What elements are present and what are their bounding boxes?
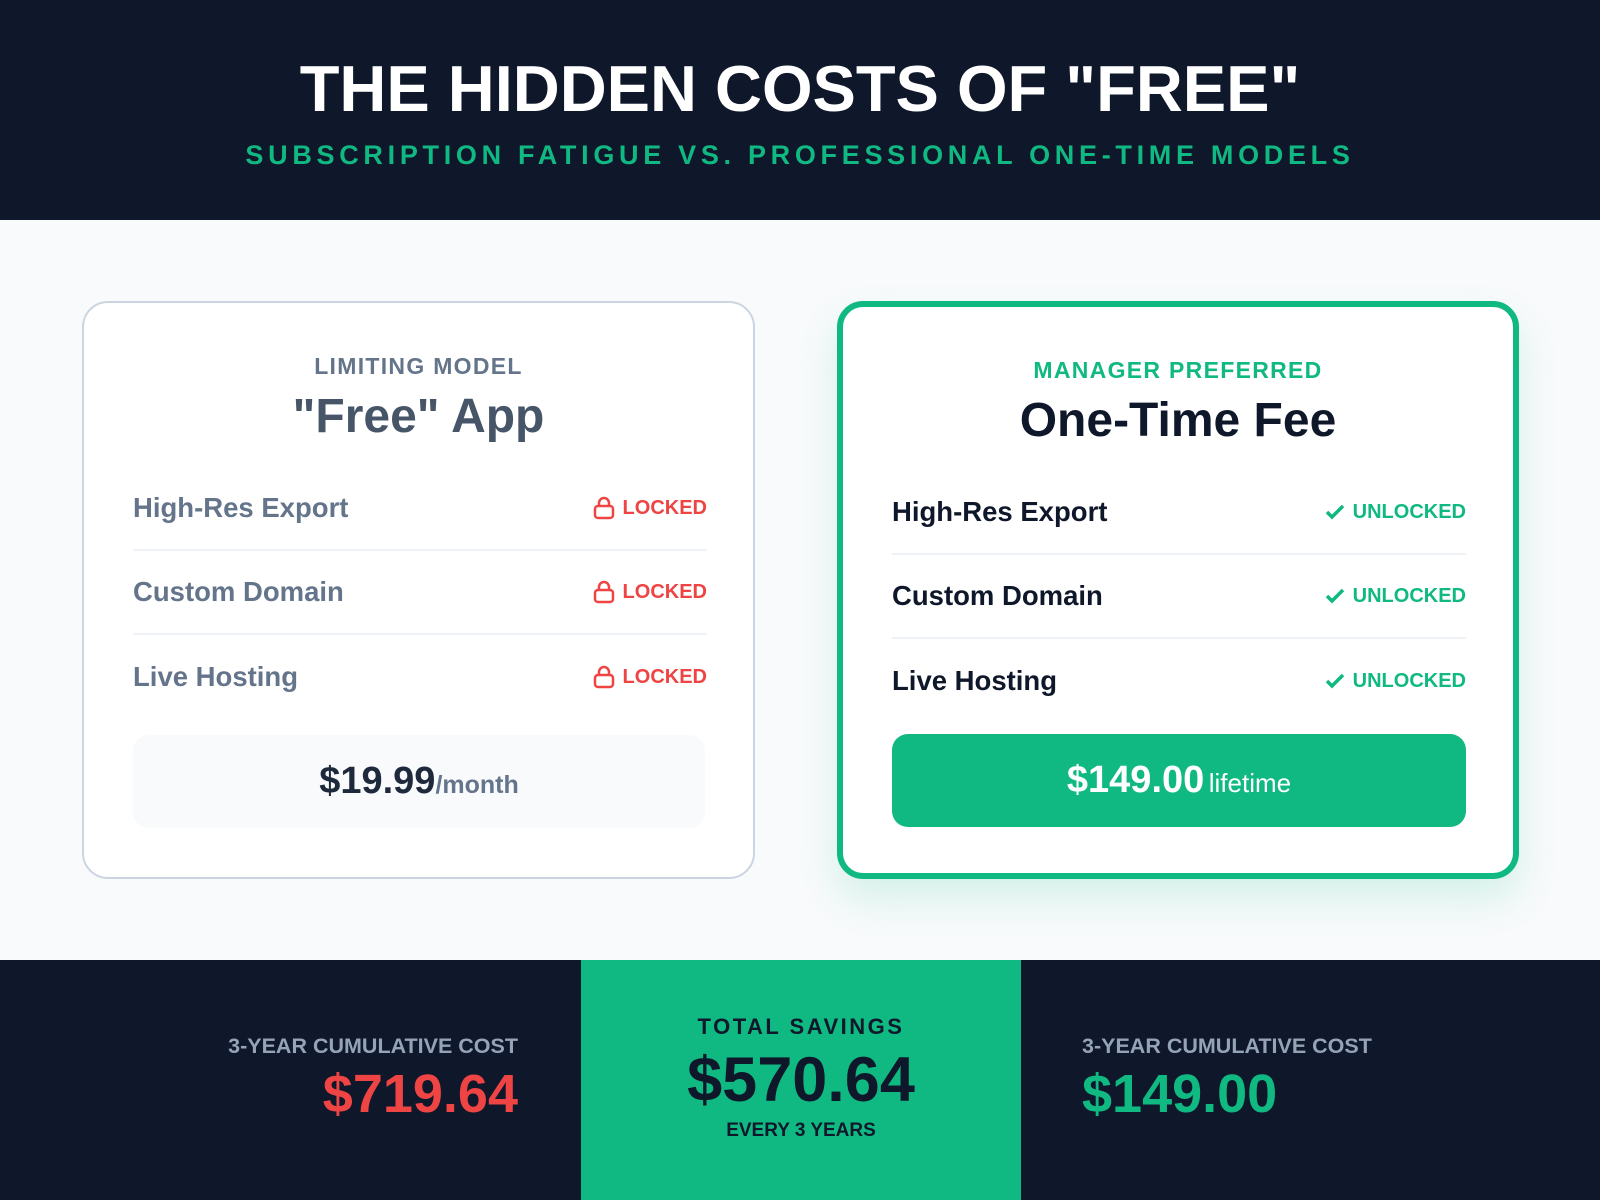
footer xyxy=(0,960,1600,1200)
feature rows: UNLOCKED xyxy=(1353,670,1466,692)
price box: $19.99/month xyxy=(319,760,519,802)
left stat: 3-YEAR CUMULATIVE COST xyxy=(228,1034,518,1058)
left stat: $719.64 xyxy=(323,1064,518,1124)
right stat: 3-YEAR CUMULATIVE COST xyxy=(1082,1034,1372,1058)
right stat xyxy=(1082,1034,1372,1124)
center savings: EVERY 3 YEARS xyxy=(726,1120,876,1141)
feature rows: High-Res Export xyxy=(892,496,1107,527)
center savings xyxy=(581,960,1021,1200)
feature rows: Live Hosting xyxy=(133,661,298,692)
feature rows xyxy=(892,496,1466,696)
price box xyxy=(133,735,705,828)
label: LIMITING MODEL xyxy=(314,353,523,379)
center savings: TOTAL SAVINGS xyxy=(698,1014,904,1039)
feature rows: UNLOCKED xyxy=(1353,584,1466,606)
label: MANAGER PREFERRED xyxy=(1033,357,1323,383)
right stat: $149.00 xyxy=(1082,1064,1277,1124)
feature rows: High-Res Export xyxy=(133,492,348,523)
title: THE HIDDEN COSTS OF "FREE" xyxy=(300,52,1300,125)
feature rows: Custom Domain xyxy=(892,580,1103,611)
price box: $149.00 lifetime xyxy=(1067,759,1291,801)
subtitle: SUBSCRIPTION FATIGUE VS. PROFESSIONAL ONE-TIME MODELS xyxy=(245,140,1355,170)
left stat xyxy=(228,1034,518,1124)
panel: one-time fee xyxy=(837,301,1519,879)
feature rows: Live Hosting xyxy=(892,665,1057,696)
feature rows: LOCKED xyxy=(623,580,707,602)
feature rows: Custom Domain xyxy=(133,576,344,607)
price box xyxy=(892,734,1466,827)
feature rows: LOCKED xyxy=(623,496,707,518)
feature rows: LOCKED xyxy=(623,666,707,688)
header xyxy=(0,0,1600,220)
center savings: $570.64 xyxy=(687,1045,915,1115)
card title: One-Time Fee xyxy=(1020,394,1336,447)
panel: free app xyxy=(82,301,755,879)
feature rows xyxy=(133,492,707,692)
card title: "Free" App xyxy=(293,390,544,443)
feature rows: UNLOCKED xyxy=(1353,500,1466,522)
